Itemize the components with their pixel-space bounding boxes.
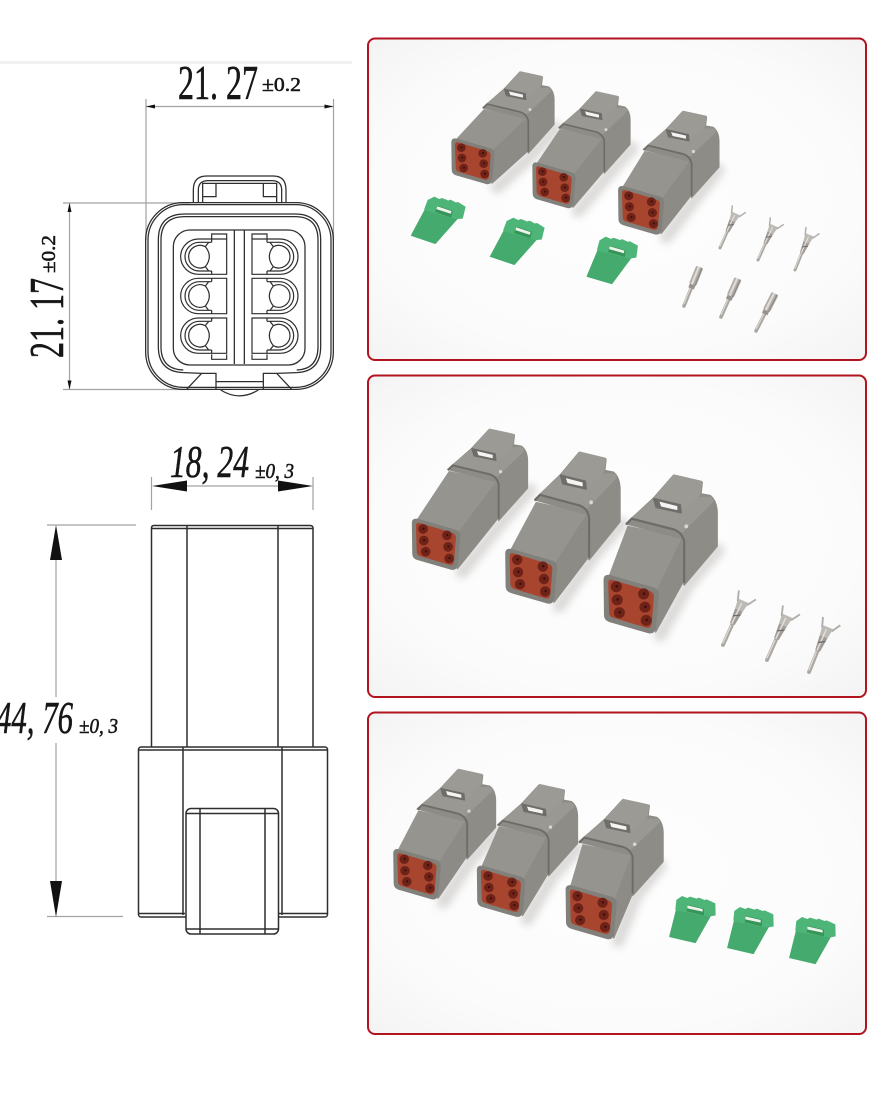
grey connector 2 xyxy=(505,453,622,606)
dimension: height 21.17 xyxy=(19,203,190,390)
grey connector 2 xyxy=(532,92,632,211)
green wedges xyxy=(670,896,836,964)
grey connector 1 xyxy=(393,770,497,902)
barrel terminals xyxy=(680,266,778,333)
dimension: width 18,24: ±0, 3 xyxy=(255,459,294,483)
panel: photo of connectors, wedges and terminals xyxy=(368,38,866,360)
dimension: width 21.27: ±0.2 xyxy=(262,74,301,96)
dimension: width 18,24: 18, 24 xyxy=(170,436,249,487)
crimp terminals xyxy=(716,590,841,676)
crimp terminals xyxy=(715,205,820,273)
dimension: width 21.27 xyxy=(146,55,334,240)
dimension: width 18,24 xyxy=(152,436,313,510)
grey connector 3 xyxy=(618,112,719,237)
connector side outline xyxy=(138,526,328,934)
panel: photo of connectors and terminals xyxy=(368,376,866,697)
panel: photo of connectors and wedges xyxy=(368,712,866,1034)
dimension: width 21.27: 21. 27 xyxy=(178,55,258,110)
grey connector 1 xyxy=(451,72,556,187)
green wedges xyxy=(410,196,639,285)
dimension: height 21.17: 21. 17 xyxy=(19,278,74,358)
grey connector 2 xyxy=(477,785,578,919)
dimension: height 21.17: ±0.2 xyxy=(38,235,60,273)
dimension: height 44,76 xyxy=(0,525,136,917)
panel: side view drawing xyxy=(0,436,328,934)
dimension: height 44,76: ±0, 3 xyxy=(79,714,118,738)
grey connector 3 xyxy=(604,476,718,635)
panel: front view drawing xyxy=(19,55,334,396)
grey connector 3 xyxy=(566,800,663,941)
grey connector 1 xyxy=(412,430,530,572)
connector front outline xyxy=(146,176,333,396)
